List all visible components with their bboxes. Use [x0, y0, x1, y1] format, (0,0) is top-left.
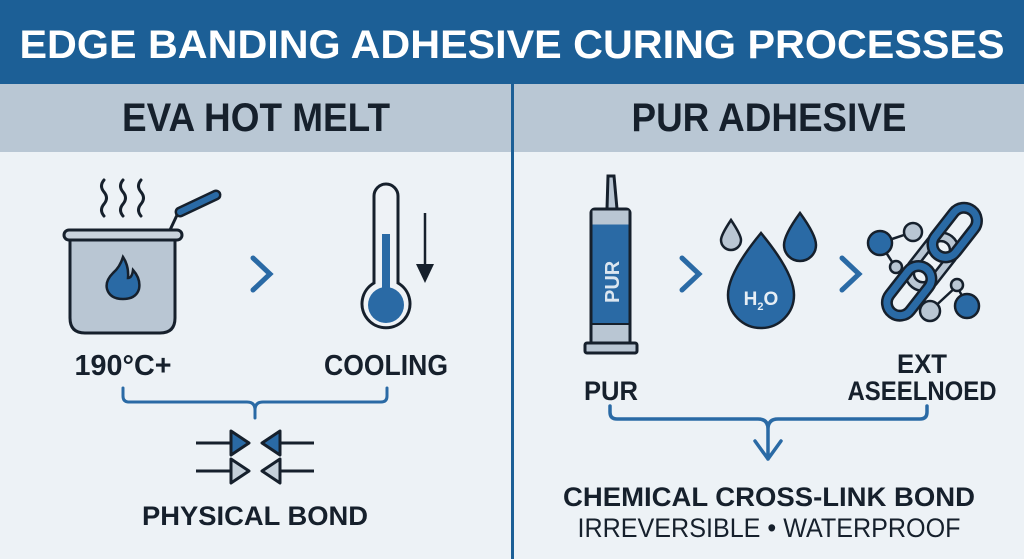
label: IRREVERSIBLE • WATERPROOF: IRREVERSIBLE • WATERPROOF	[578, 513, 960, 543]
subheader: EVA HOT MELT: EVA HOT MELT	[122, 96, 390, 140]
arrow: chevron	[682, 258, 699, 290]
arrow: chevron	[253, 258, 270, 290]
icon: heated pot	[64, 180, 216, 333]
brace with arrow	[610, 406, 927, 459]
icon: water drops H2O: H	[744, 289, 757, 310]
icon: water drops H2O	[721, 213, 816, 328]
label: PHYSICAL BOND: PHYSICAL BOND	[142, 501, 368, 531]
icon: PUR tube	[585, 176, 637, 353]
icon: thermometer	[362, 184, 434, 328]
icon: water drops H2O: 2	[757, 301, 764, 313]
icon: physical bond arrows	[196, 431, 314, 483]
title bar	[0, 0, 1024, 84]
label: EXT ASEELNOED: ASEELNOED	[848, 376, 996, 406]
icon: PUR tube: PUR	[602, 260, 624, 303]
label: EXT ASEELNOED	[848, 349, 996, 406]
subheader: EVA HOT MELT	[0, 84, 512, 152]
panel: EVA hot melt	[64, 180, 448, 531]
label: PUR: PUR	[584, 376, 638, 406]
icon: water drops H2O: O	[764, 289, 778, 310]
label: CHEMICAL CROSS-LINK BOND: CHEMICAL CROSS-LINK BOND	[563, 482, 975, 512]
icon: chain with molecules	[868, 202, 982, 321]
subheader: PUR ADHESIVE	[512, 84, 1024, 152]
subheader: PUR ADHESIVE: PUR ADHESIVE	[632, 96, 906, 140]
arrow: chevron	[842, 258, 859, 290]
brace	[123, 388, 387, 418]
label: EXT ASEELNOED: EXT	[897, 349, 947, 379]
label: 190°C+: 190°C+	[74, 350, 172, 382]
title bar: EDGE BANDING ADHESIVE CURING PROCESSES	[20, 23, 1004, 67]
label: COOLING: COOLING	[324, 350, 448, 382]
panel: PUR adhesive	[563, 176, 996, 543]
